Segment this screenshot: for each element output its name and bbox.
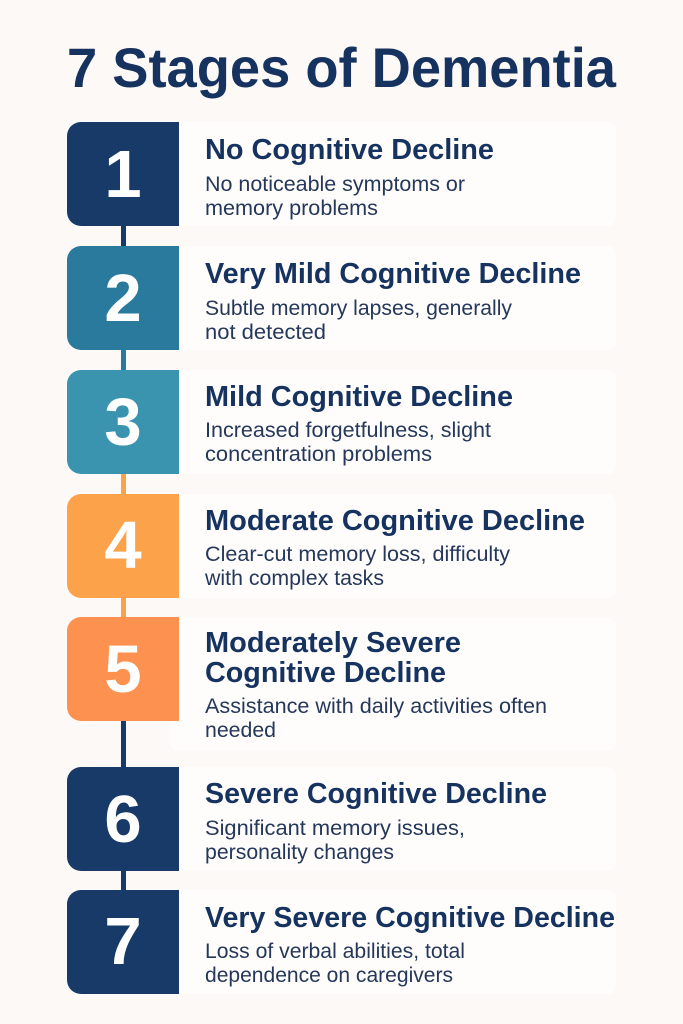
panel: stage 7	[67, 890, 616, 994]
panel: stage 4: Moderate Cognitive Decline	[205, 505, 585, 537]
panel: stage 3: concentration problems	[205, 443, 432, 466]
panel: stage 5: Moderately Severe	[205, 627, 461, 659]
panel: stage 2	[67, 246, 616, 350]
title: 7 Stages of Dementia	[67, 36, 617, 99]
panel: stage 7: 7	[104, 904, 142, 979]
panel: stage 3: Mild Cognitive Decline	[205, 381, 513, 413]
panel: stage 7: dependence on caregivers	[205, 964, 453, 987]
panel: stage 5: Cognitive Decline	[205, 657, 446, 689]
panel: stage 6	[67, 767, 616, 871]
connector: timeline line	[121, 226, 126, 890]
panel: stage 2: 2	[104, 261, 142, 336]
panel: stage 2: Very Mild Cognitive Decline	[205, 258, 581, 290]
panel: stage 7: Loss of verbal abilities, total	[205, 940, 465, 963]
panel: stage 2: Subtle memory lapses, generally	[205, 297, 512, 320]
panel: stage 5: 5	[104, 632, 142, 707]
panel: stage 6: 6	[104, 782, 142, 857]
panel: stage 4	[67, 494, 616, 598]
panel: stage 6: Severe Cognitive Decline	[205, 778, 547, 810]
panel: stage 5: needed	[205, 719, 276, 742]
panel: stage 5	[67, 617, 616, 751]
panel: stage 1: No noticeable symptoms or	[205, 173, 465, 196]
panel: stage 4: with complex tasks	[204, 567, 384, 590]
panel: stage 6: personality changes	[205, 841, 394, 864]
panel: stage 3: 3	[104, 385, 142, 460]
panel: stage 6: Significant memory issues,	[205, 817, 465, 840]
panel: stage 1: memory problems	[205, 197, 378, 220]
panel: stage 1: 1	[104, 137, 142, 212]
panel: stage 5: Assistance with daily activities often	[205, 695, 547, 718]
panel: stage 2: not detected	[205, 321, 326, 344]
panel: stage 7: Very Severe Cognitive Decline	[205, 902, 615, 934]
panel: stage 4: 4	[104, 508, 142, 583]
panel: stage 3: Increased forgetfulness, slight	[205, 419, 491, 442]
panel: stage 4: Clear-cut memory loss, difficulty	[205, 543, 510, 566]
panel: stage 1: No Cognitive Decline	[205, 134, 494, 166]
panel: stage 3	[67, 370, 616, 474]
panel: stage 1	[67, 122, 616, 226]
